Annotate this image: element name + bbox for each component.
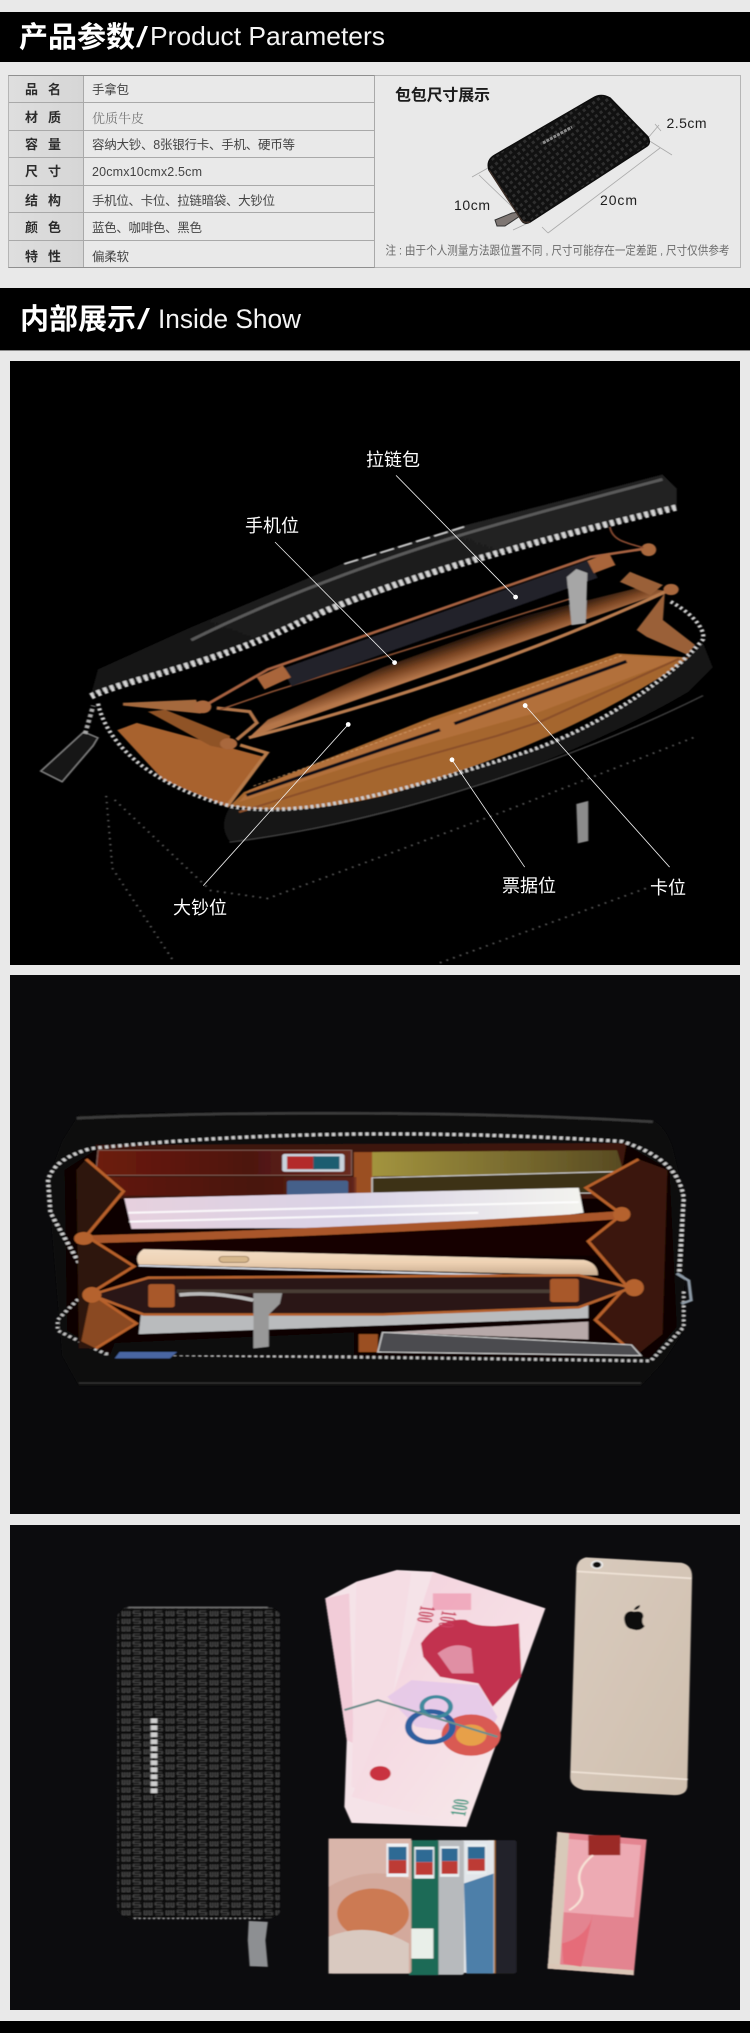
wallet lower body band bbox=[224, 643, 713, 841]
zipper bbox=[48, 1134, 684, 1273]
row: feel: 性 bbox=[48, 249, 61, 264]
row: size: 20cmx10cmx2.5cm bbox=[92, 165, 202, 179]
heading: inside show bbox=[0, 288, 750, 351]
row: structure bbox=[25, 193, 275, 208]
dimension labels: 2.5cm bbox=[666, 115, 706, 131]
panel: photo 3 contents flat lay bbox=[10, 1525, 740, 2010]
heading: bag size: 包包尺寸展示 bbox=[395, 86, 490, 104]
icon: wallet zip pull bbox=[41, 732, 98, 782]
row: size: 寸 bbox=[48, 164, 61, 179]
side pleats bbox=[77, 1159, 667, 1356]
row: feel: 偏柔软 bbox=[92, 249, 129, 264]
lower zipper bbox=[98, 601, 703, 809]
row: capacity: 容 bbox=[25, 137, 38, 152]
bank notes bbox=[124, 1188, 584, 1229]
middle pocket bbox=[77, 1215, 627, 1256]
callout labels: 手机位 bbox=[245, 516, 299, 536]
row: colours: 颜 bbox=[25, 220, 38, 235]
icon: apple logo bbox=[624, 1605, 645, 1630]
row: structure: 手机位、卡位、拉链暗袋、大钞位 bbox=[92, 193, 275, 208]
bank notes: 100 bbox=[433, 1609, 462, 1629]
wallet body bbox=[48, 1112, 685, 1386]
bank notes bbox=[325, 1570, 545, 1827]
row: material: 质 bbox=[48, 110, 61, 125]
dimension labels: 10cm bbox=[454, 197, 490, 213]
row: size bbox=[25, 164, 202, 179]
heading: inside show: Inside Show bbox=[158, 304, 301, 334]
row: feel: 特 bbox=[25, 249, 38, 264]
panel: photo 1 annotated wallet interior bbox=[10, 361, 740, 965]
row: colours: 色 bbox=[48, 220, 61, 235]
callout labels bbox=[173, 450, 686, 918]
panel: parameter table bbox=[8, 75, 740, 268]
cigarette pack bbox=[548, 1832, 647, 1975]
row: structure: 构 bbox=[48, 193, 61, 208]
middle pocket bbox=[249, 587, 667, 738]
heading: inside show: / bbox=[137, 304, 152, 336]
panel: photo 2 filled wallet bbox=[10, 975, 740, 1514]
row: capacity: 容纳大钞、8张银行卡、手机、硬币等 bbox=[92, 137, 295, 152]
bank notes: 100 bbox=[412, 1604, 441, 1624]
icon: closed wallet bbox=[488, 96, 649, 223]
reflection bbox=[106, 736, 698, 963]
row: material bbox=[25, 110, 144, 126]
heading: product parameters: 产品参数 bbox=[19, 21, 135, 54]
phone bbox=[137, 1249, 598, 1275]
row: product name: 品 bbox=[25, 82, 38, 97]
callout dots bbox=[346, 595, 528, 762]
panel: bag size diagram bbox=[386, 86, 730, 258]
row: colours bbox=[25, 220, 202, 235]
lower cards and receipts bbox=[110, 1304, 641, 1358]
row: material: 优质牛皮 bbox=[92, 111, 144, 126]
row: product name: 名 bbox=[48, 82, 61, 97]
heading: product parameters: / bbox=[136, 22, 149, 54]
zip pocket bbox=[194, 527, 679, 749]
row: capacity: 量 bbox=[48, 137, 61, 152]
callout labels: 卡位 bbox=[650, 878, 686, 898]
lower tray bbox=[230, 653, 689, 812]
row: size: 尺 bbox=[25, 164, 38, 179]
heading: inside show: 内部展示 bbox=[20, 303, 136, 336]
left pocket flap bbox=[117, 700, 268, 807]
icon: zip pull bbox=[248, 1921, 268, 1967]
icon: zip puller bbox=[495, 212, 520, 226]
row: material: 材 bbox=[25, 110, 38, 125]
phone bbox=[570, 1557, 692, 1795]
row: feel bbox=[25, 249, 129, 264]
upper wallet flap bbox=[91, 475, 677, 696]
row: product name: 手拿包 bbox=[92, 82, 129, 97]
closed wallet bbox=[117, 1607, 280, 1967]
bank cards bbox=[329, 1838, 517, 1975]
bottom bar bbox=[0, 2021, 750, 2033]
callout labels: 票据位 bbox=[502, 876, 556, 896]
callout labels: 拉链包 bbox=[366, 450, 420, 470]
callout leader lines bbox=[203, 475, 670, 886]
dimension lines bbox=[472, 124, 672, 233]
bank cards bbox=[96, 1150, 624, 1196]
dimension labels bbox=[454, 115, 706, 213]
heading: product parameters bbox=[0, 12, 750, 62]
callout labels: 大钞位 bbox=[173, 898, 227, 918]
heading: product parameters: Product Parameters bbox=[150, 21, 385, 51]
zip pocket bbox=[74, 1207, 644, 1348]
dimension labels: 20cm bbox=[600, 192, 637, 208]
row: colours: 蓝色、咖啡色、黑色 bbox=[92, 220, 202, 235]
row: product name bbox=[25, 82, 129, 97]
row: structure: 结 bbox=[25, 193, 38, 208]
bank notes: 100 bbox=[445, 1798, 474, 1817]
wallet interior bbox=[65, 1145, 677, 1357]
